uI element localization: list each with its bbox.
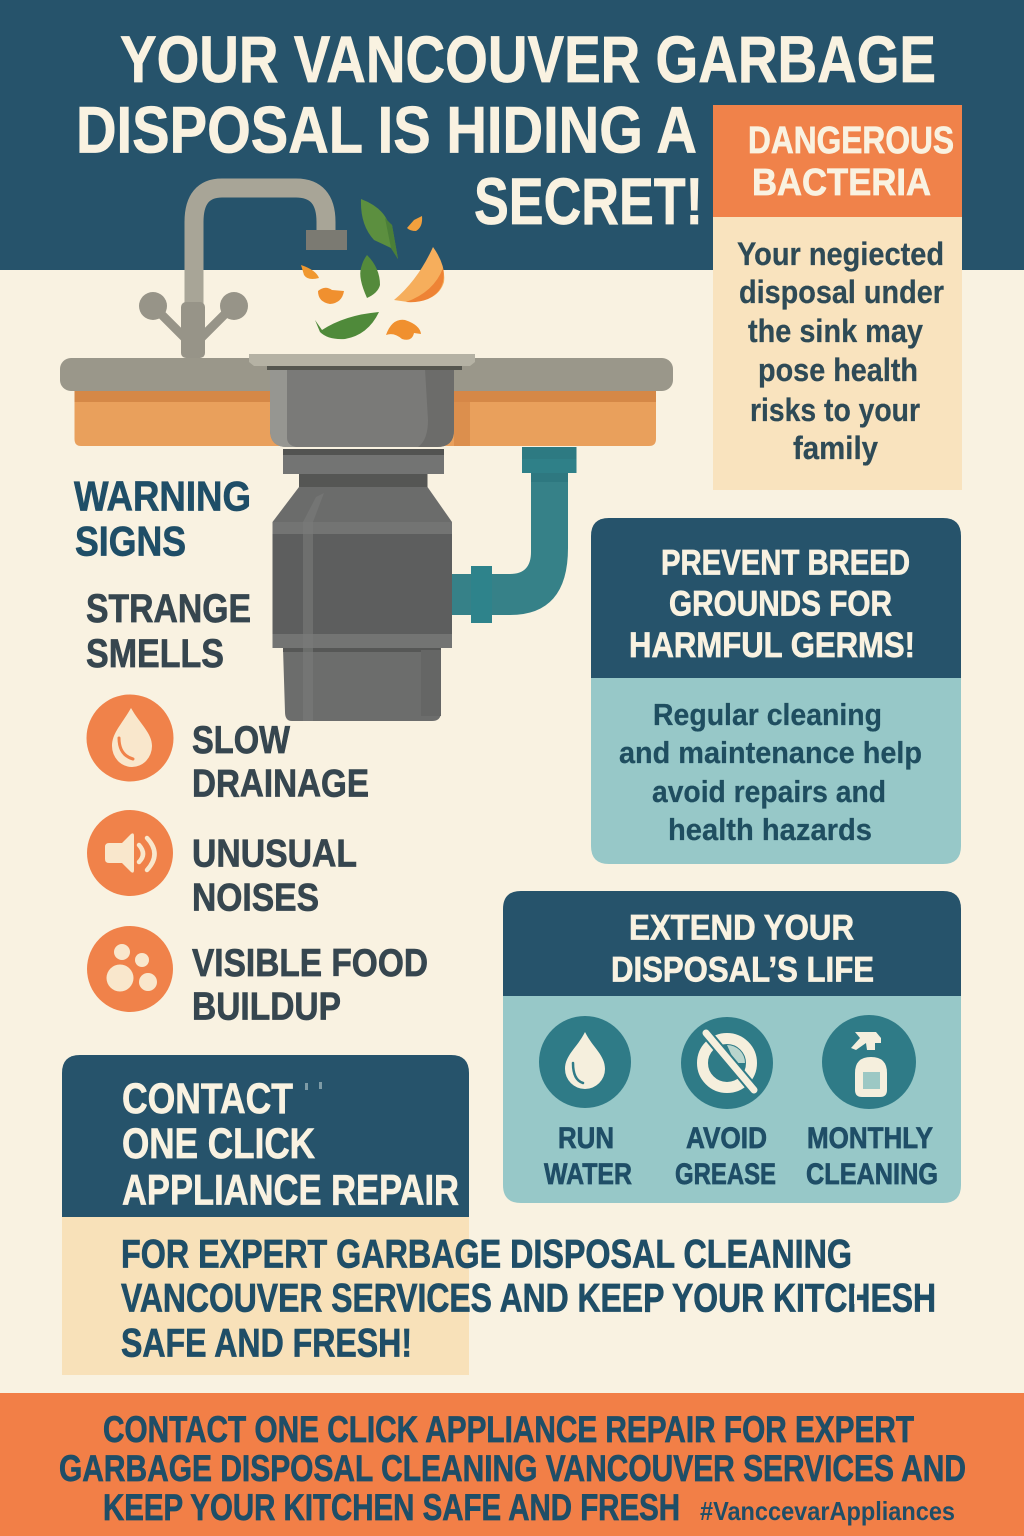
panel: warning signs	[74, 472, 428, 1028]
text: unusual noises: UNUSUAL	[192, 832, 357, 876]
heading: contact one click appliance repair	[122, 1075, 459, 1214]
text: bacteria description	[737, 236, 944, 466]
text: prevent description: health hazards	[668, 812, 872, 847]
heading: prevent germs	[629, 544, 915, 665]
label: avoid grease: GREASE	[675, 1158, 776, 1191]
heading: contact one click appliance repair: CONTACT	[122, 1075, 293, 1123]
text: slow drainage	[192, 719, 369, 806]
label: avoid grease: AVOID	[686, 1122, 767, 1155]
title	[76, 22, 936, 238]
footer text: KEEP YOUR KITCHEN SAFE AND FRESH	[103, 1487, 680, 1528]
text: unusual noises	[192, 832, 357, 920]
text: bacteria description: Your negiected	[737, 236, 944, 272]
heading: extend disposal life: DISPOSAL’S LIFE	[611, 950, 874, 990]
heading: dangerous bacteria	[748, 120, 954, 204]
panel: prevent germs	[591, 518, 961, 864]
icon: faucet	[139, 188, 347, 358]
heading: warning signs: SIGNS	[75, 518, 186, 564]
drain pipe	[452, 447, 576, 623]
label: run water: RUN	[558, 1122, 614, 1155]
heading: dangerous bacteria: DANGEROUS	[748, 120, 954, 162]
hashtag: #VanccevarAppliances	[700, 1496, 955, 1526]
heading: warning signs	[74, 472, 251, 564]
text: visible food buildup: BUILDUP	[192, 986, 341, 1028]
footer banner	[0, 1393, 1024, 1536]
heading: warning signs: WARNING	[74, 472, 251, 520]
food scraps falling	[301, 199, 444, 340]
icon: drainage drop	[86, 694, 174, 782]
icon: food particles	[87, 926, 173, 1012]
sink basin	[249, 354, 475, 447]
heading: prevent germs: GROUNDS FOR	[669, 584, 892, 624]
text: strange smells: STRANGE	[86, 587, 251, 631]
footer text	[59, 1409, 966, 1528]
text: slow drainage: SLOW	[192, 719, 290, 762]
label: run water: WATER	[544, 1158, 632, 1191]
text: expert cleaning call to action	[121, 1232, 936, 1366]
text: expert cleaning call to action: FOR EXPERT GARBAGE DISPOSAL CLEANING	[121, 1232, 852, 1276]
text: bacteria description: family	[793, 430, 878, 466]
cabinet	[74, 391, 656, 446]
disposal unit	[272, 449, 452, 721]
heading: contact one click appliance repair: ONE CLICK	[122, 1120, 315, 1168]
heading: prevent germs: PREVENT BREED	[661, 544, 910, 582]
text: slow drainage: DRAINAGE	[192, 762, 369, 806]
text: prevent description: Regular cleaning	[653, 697, 882, 732]
text: visible food buildup	[192, 942, 428, 1028]
countertop	[60, 358, 673, 391]
text: prevent description: avoid repairs and	[652, 774, 886, 809]
title: SECRET!	[474, 164, 703, 238]
heading: contact one click appliance repair: APPLIANCE REPAIR	[122, 1166, 459, 1214]
text: unusual noises: NOISES	[192, 876, 319, 920]
text: visible food buildup: VISIBLE FOOD	[192, 942, 428, 985]
icon: avoid grease	[681, 1017, 773, 1109]
heading: extend disposal life: EXTEND YOUR	[629, 908, 854, 948]
text: prevent description	[619, 697, 922, 847]
label: monthly cleaning	[806, 1122, 938, 1191]
text: bacteria description: the sink may	[748, 313, 923, 349]
text: strange smells: SMELLS	[86, 632, 224, 676]
icon: run water	[539, 1016, 631, 1108]
title: DISPOSAL IS HIDING A	[76, 92, 697, 166]
illustration: sink with garbage disposal	[60, 188, 673, 721]
panel: extend disposal life	[503, 891, 961, 1203]
label: monthly cleaning: MONTHLY	[807, 1122, 933, 1155]
icon: monthly cleaning spray bottle	[822, 1015, 916, 1109]
icon: speaker	[87, 810, 173, 896]
heading: dangerous bacteria: BACTERIA	[752, 162, 931, 204]
text: bacteria description: pose health	[758, 352, 918, 388]
label: avoid grease	[675, 1122, 776, 1191]
label: run water	[544, 1122, 632, 1191]
label: monthly cleaning: CLEANING	[806, 1158, 938, 1191]
text: bacteria description: disposal under	[739, 274, 944, 310]
panel: contact one click	[62, 1055, 936, 1375]
text: expert cleaning call to action: SAFE AND FRESH!	[121, 1322, 412, 1366]
heading: extend disposal life	[611, 908, 874, 990]
panel: dangerous bacteria	[713, 105, 962, 490]
text: strange smells	[86, 587, 251, 676]
heading: prevent germs: HARMFUL GERMS!	[629, 626, 915, 665]
text: prevent description: and maintenance help	[619, 735, 922, 770]
text: bacteria description: risks to your	[750, 392, 920, 428]
